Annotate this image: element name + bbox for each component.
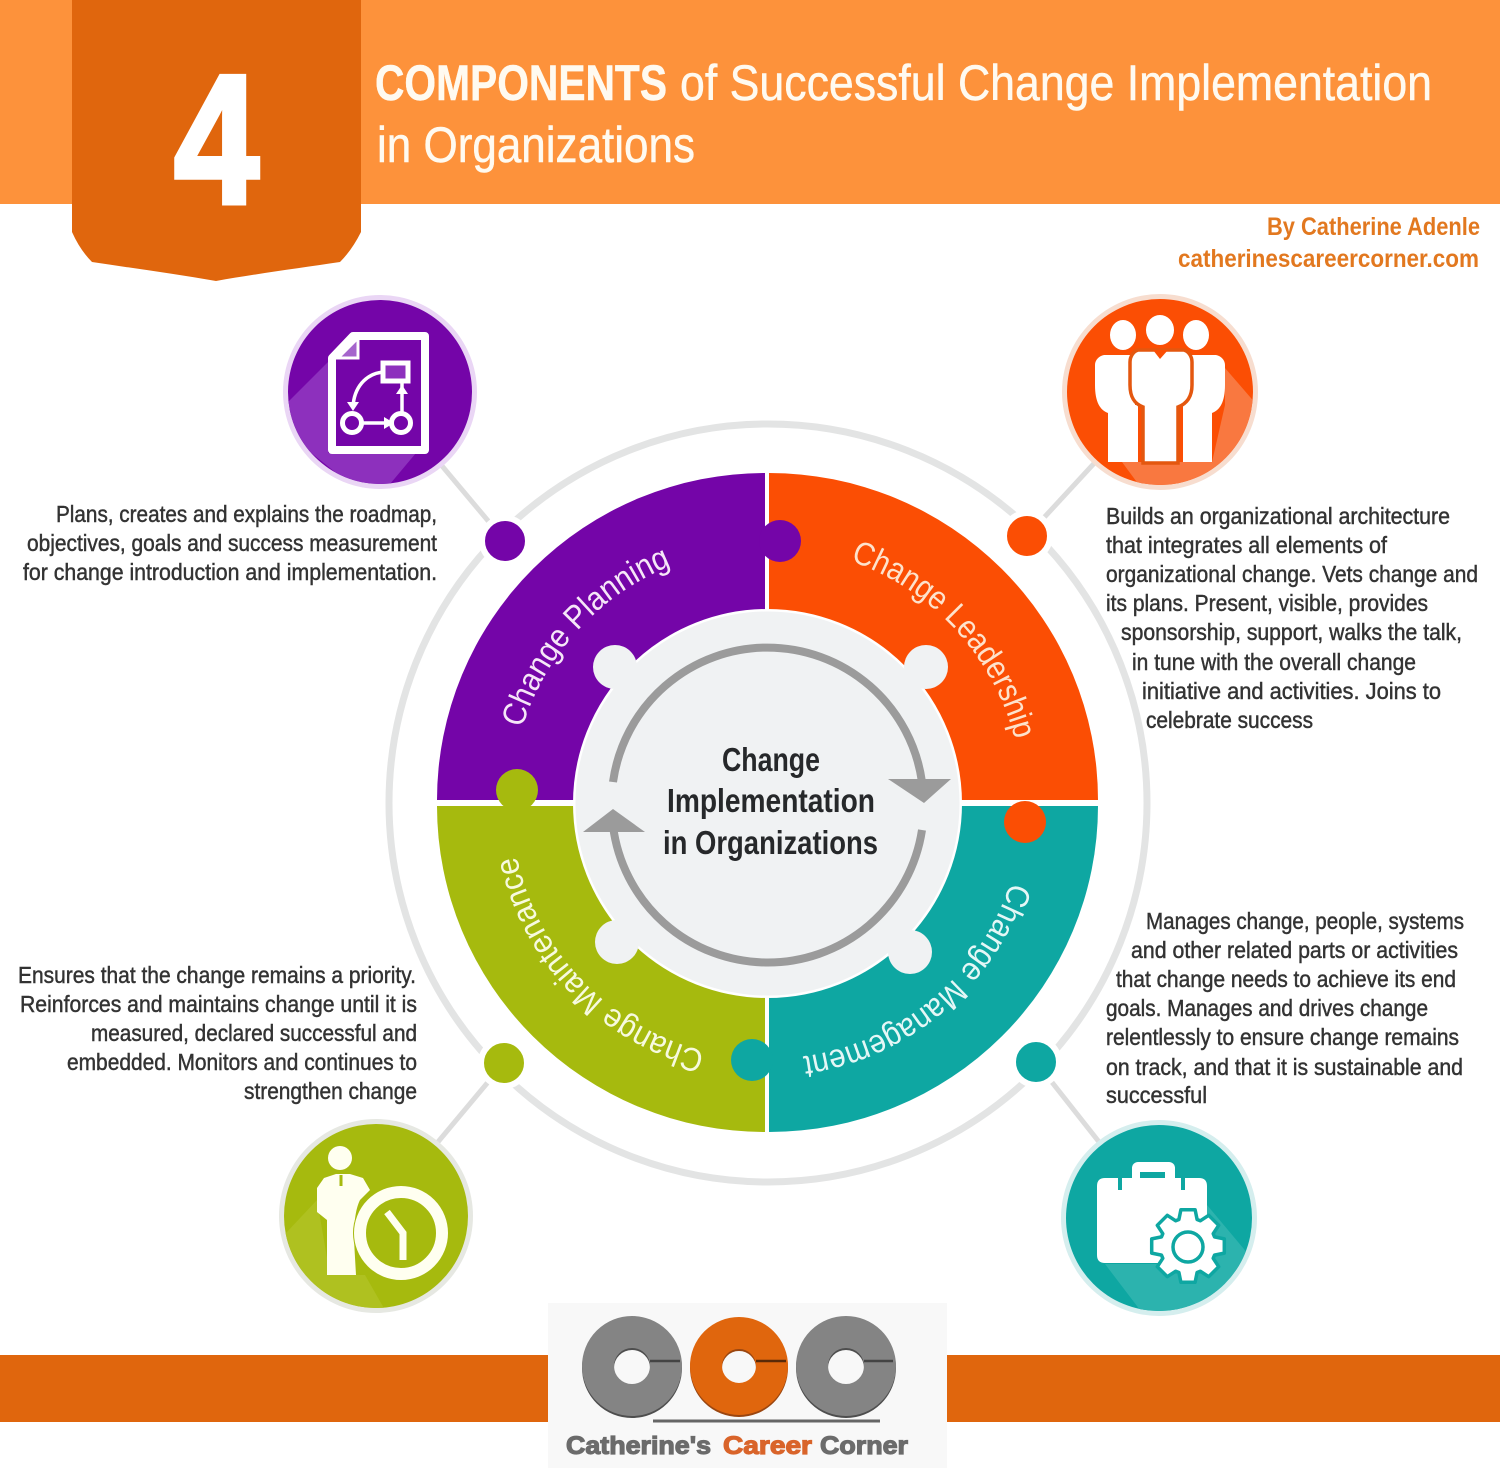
- footer bar: right: [947, 1355, 1500, 1422]
- segment: change management: [769, 806, 1098, 1132]
- logo wordmark: Career: [723, 1432, 812, 1460]
- logo ring: grey left: [598, 1332, 680, 1402]
- text: management description: Manages change, people, systems: [1146, 908, 1464, 934]
- icon: planning document flowchart: [283, 295, 477, 489]
- text: management description: relentlessly to ensure change remains: [1106, 1024, 1459, 1050]
- label: change management: Change Management: [802, 886, 1030, 1078]
- segment: change planning: [437, 473, 765, 800]
- icon: management briefcase and gear: [1061, 1120, 1257, 1316]
- text: maintenance description: strengthen change: [244, 1078, 417, 1104]
- label: change maintenance: Change Maintenance: [501, 858, 702, 1071]
- text: planning description: [23, 501, 438, 585]
- text: maintenance description: embedded. Monitors and continues to: [67, 1049, 417, 1075]
- text: leadership description: in tune with the overall change: [1132, 649, 1416, 675]
- text: maintenance description: measured, declared successful and: [91, 1020, 417, 1046]
- author byline: [1178, 213, 1480, 273]
- text: maintenance description: [18, 962, 417, 1104]
- connector: leadership: [1027, 392, 1160, 536]
- logo wordmark: [566, 1432, 908, 1460]
- central wheel: [437, 473, 1098, 1132]
- text: maintenance description: Ensures that the change remains a priority.: [18, 962, 416, 988]
- center title: Change: [722, 741, 820, 778]
- center disc: [574, 610, 960, 996]
- title: [375, 55, 1432, 173]
- number badge: 4: [174, 36, 259, 242]
- text: management description: goals. Manages and drives change: [1106, 995, 1428, 1021]
- text: management description: and other related parts or activities: [1131, 937, 1458, 963]
- text: planning description: for change introduction and implementation.: [23, 559, 437, 585]
- footer bar: left: [0, 1355, 548, 1422]
- text: leadership description: initiative and activities. Joins to: [1142, 678, 1441, 704]
- text: leadership description: Builds an organizational architecture: [1106, 503, 1450, 529]
- text: maintenance description: Reinforces and maintains change until it is: [20, 991, 417, 1017]
- text: management description: on track, and that it is sustainable and: [1106, 1054, 1463, 1080]
- text: leadership description: that integrates all elements of: [1106, 532, 1388, 558]
- header banner: [0, 0, 1500, 204]
- center title: [663, 741, 878, 861]
- puzzle knob: purple: [759, 520, 801, 562]
- cycle arrow: bottom: [583, 809, 922, 963]
- text: management description: [1106, 908, 1464, 1108]
- title: of Successful Change Implementation: [680, 55, 1432, 111]
- logo wordmark: Catherine's: [566, 1432, 711, 1460]
- text: management description: successful: [1106, 1082, 1207, 1108]
- title: in Organizations: [377, 117, 695, 173]
- logo ring: orange: [706, 1333, 786, 1401]
- icon: leadership team: [1062, 294, 1258, 490]
- center title: Implementation: [667, 782, 875, 819]
- text: management description: that change needs to achieve its end: [1116, 966, 1456, 992]
- text: planning description: objectives, goals and success measurement: [27, 530, 438, 556]
- text: leadership description: its plans. Present, visible, provides: [1106, 590, 1428, 616]
- connector: planning: [380, 392, 505, 541]
- text: leadership description: celebrate success: [1146, 707, 1313, 733]
- text: planning description: Plans, creates and explains the roadmap,: [56, 501, 437, 527]
- number badge: [72, 0, 361, 281]
- segment: change leadership: [769, 473, 1098, 800]
- puzzle knob: orange: [1004, 801, 1046, 843]
- logo ring: grey right: [812, 1332, 893, 1402]
- dot: management: [1013, 1039, 1059, 1085]
- text: leadership description: sponsorship, support, walks the talk,: [1121, 619, 1462, 645]
- puzzle knob: green: [496, 769, 538, 811]
- center title: in Organizations: [663, 824, 878, 861]
- puzzle knob: teal: [731, 1039, 773, 1081]
- label: change leadership: Change Leadership: [854, 542, 1032, 737]
- title: COMPONENTS: [375, 55, 667, 111]
- text: leadership description: [1106, 503, 1478, 733]
- outer ring: [389, 424, 1147, 1182]
- label: change planning: Change Planning: [503, 550, 670, 724]
- segment: change maintenance: [437, 806, 765, 1132]
- dot: maintenance: [481, 1040, 527, 1086]
- connector: maintenance: [376, 1063, 504, 1216]
- icon: maintenance person with clock: [270, 1119, 473, 1320]
- connector: management: [1036, 1062, 1159, 1218]
- dot: leadership: [1004, 513, 1050, 559]
- dot: planning: [482, 518, 528, 564]
- logo wordmark: Corner: [820, 1432, 908, 1460]
- logo: [548, 1303, 947, 1468]
- cycle arrow: top: [613, 648, 951, 803]
